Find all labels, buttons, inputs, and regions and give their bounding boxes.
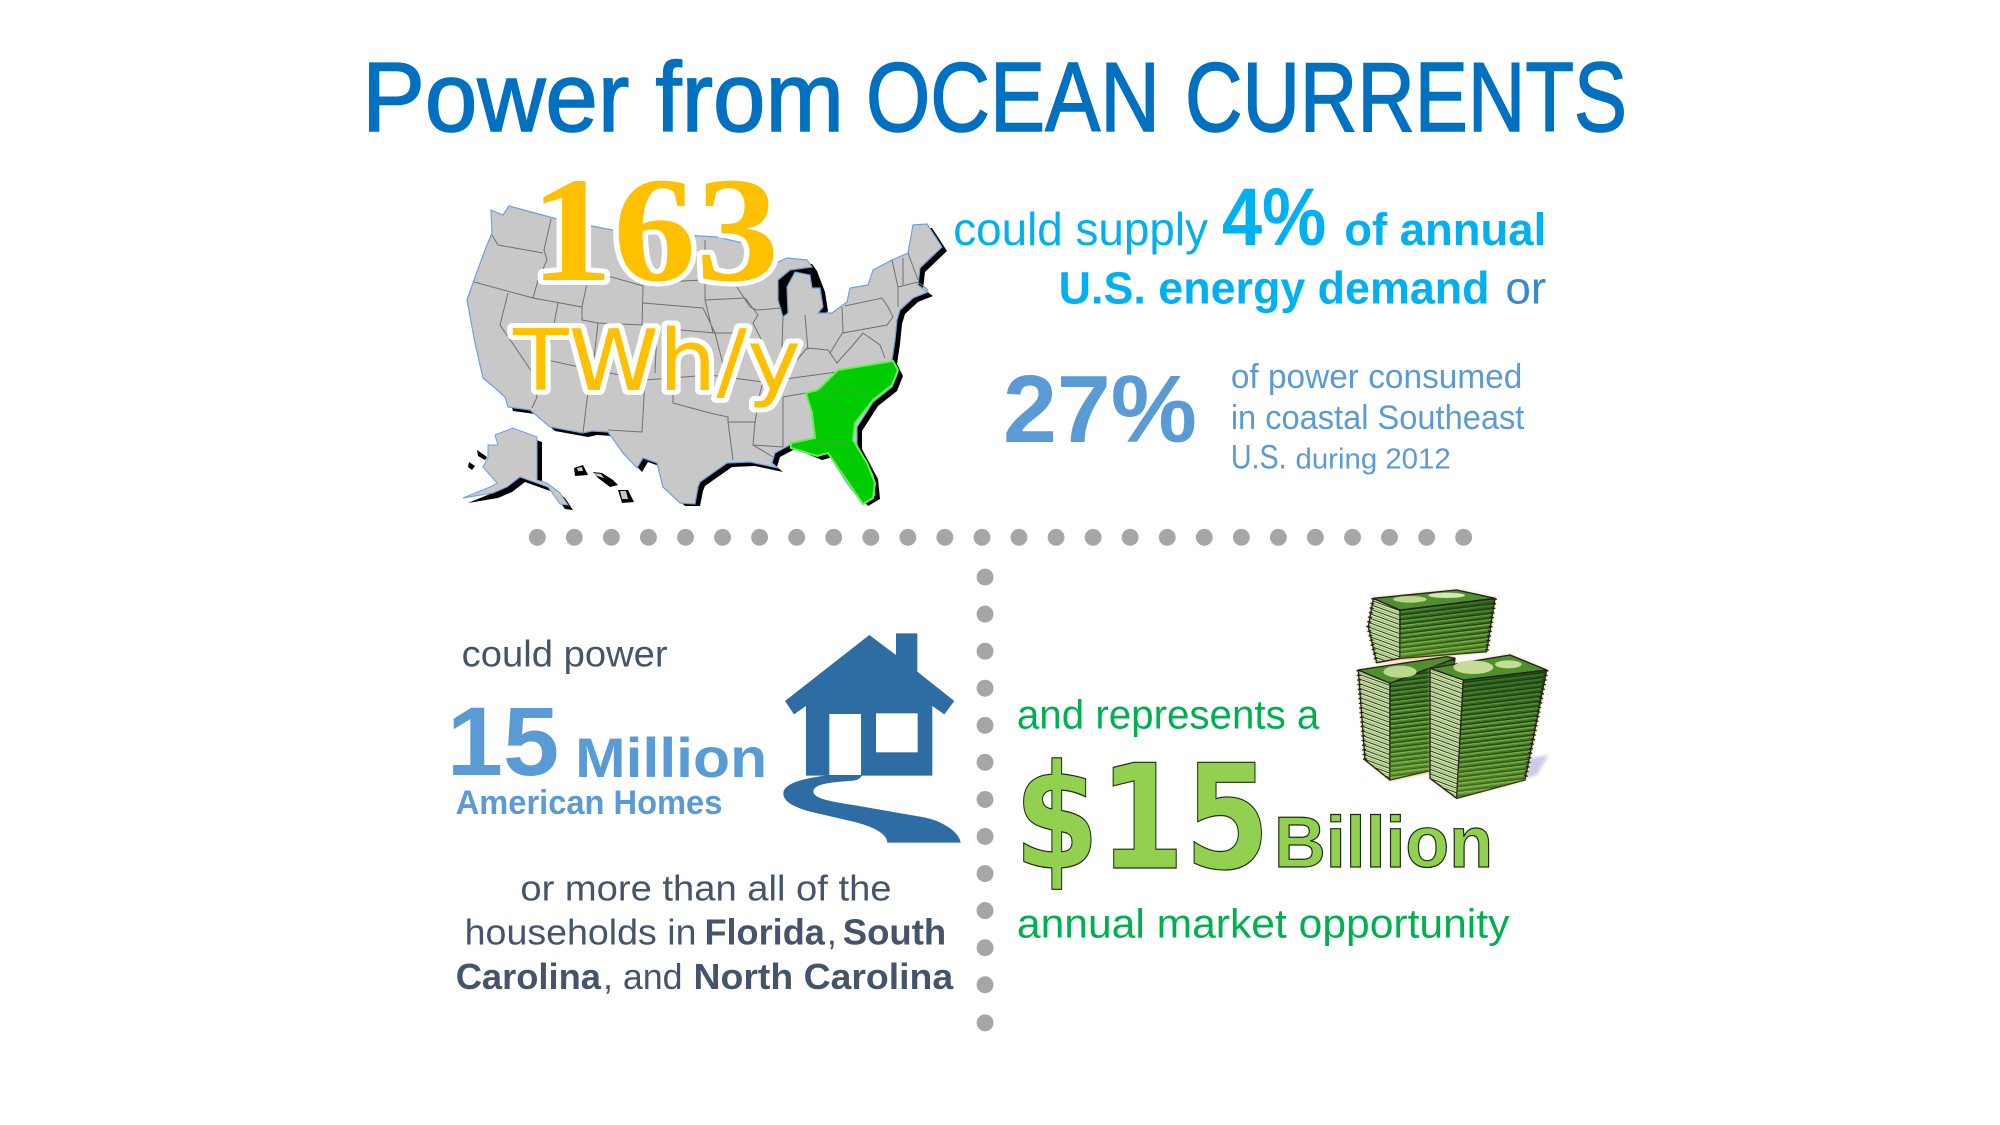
icon: stacks of money xyxy=(1358,590,1548,798)
back stack xyxy=(1368,590,1495,663)
title: OCEAN xyxy=(866,42,1160,152)
text: households comparison: Carolina xyxy=(456,957,602,997)
text: households comparison: households in xyxy=(465,912,697,952)
title xyxy=(362,42,1627,152)
text: households comparison: North Carolina xyxy=(694,957,954,997)
27% description xyxy=(1231,358,1525,477)
left stack xyxy=(1358,657,1455,781)
27% description: in coastal Southeast xyxy=(1231,399,1525,437)
163 TWh/y figure xyxy=(512,147,801,411)
statistic: $15 Billion: $15 xyxy=(1014,734,1270,903)
icon: house with path xyxy=(783,633,961,843)
text: households comparison: , and xyxy=(603,957,683,997)
27% description: of power consumed xyxy=(1231,358,1522,396)
alaska xyxy=(463,428,573,510)
text: households comparison xyxy=(456,868,954,997)
statistic: 15 Million American Homes: 15 xyxy=(447,687,559,796)
statement: 4% of annual U.S. energy demand: 4% xyxy=(1222,172,1326,263)
map shadow xyxy=(472,210,947,506)
lake michigan xyxy=(778,267,812,317)
text: households comparison: , xyxy=(827,912,837,952)
TWh/y: TWh/y xyxy=(512,312,801,411)
hawaii xyxy=(574,465,634,503)
statistic: 15 Million American Homes: American Homes xyxy=(456,784,722,822)
statistic: $15 Billion: Billion xyxy=(1274,803,1493,883)
statistic: 15 Million American Homes: Million xyxy=(575,727,767,789)
front stack xyxy=(1430,655,1548,798)
statement: 4% of annual U.S. energy demand: of annual xyxy=(1344,204,1546,255)
text: and represents a: and represents a xyxy=(1017,691,1320,737)
text: households comparison: South xyxy=(843,912,946,952)
text: households comparison: Florida xyxy=(704,912,826,952)
title: CURRENTS xyxy=(1185,42,1627,152)
state borders xyxy=(474,219,928,460)
statement: 4% of annual U.S. energy demand xyxy=(953,172,1546,313)
statistic: 15 Million American Homes xyxy=(447,687,767,822)
163: 163 xyxy=(530,147,779,313)
title: Power from xyxy=(362,42,844,152)
statistic: $15 Billion xyxy=(1014,734,1493,903)
27% description: during 2012 xyxy=(1295,444,1451,476)
statistic: 27%: 27% xyxy=(1003,357,1197,463)
text: annual market opportunity: annual market opportunity xyxy=(1017,900,1510,946)
US map with Southeast highlighted xyxy=(463,206,947,510)
southeast states xyxy=(791,361,898,504)
27% description: U.S. xyxy=(1231,439,1287,477)
statement: 4% of annual U.S. energy demand: U.S. energy demand xyxy=(1059,262,1490,313)
statement: 4% of annual U.S. energy demand: or xyxy=(1505,262,1546,313)
statement: 4% of annual U.S. energy demand: could supply xyxy=(953,203,1209,255)
text: households comparison: or more than all of the xyxy=(520,868,892,908)
text: could power: could power xyxy=(462,634,668,675)
map land xyxy=(467,206,942,504)
